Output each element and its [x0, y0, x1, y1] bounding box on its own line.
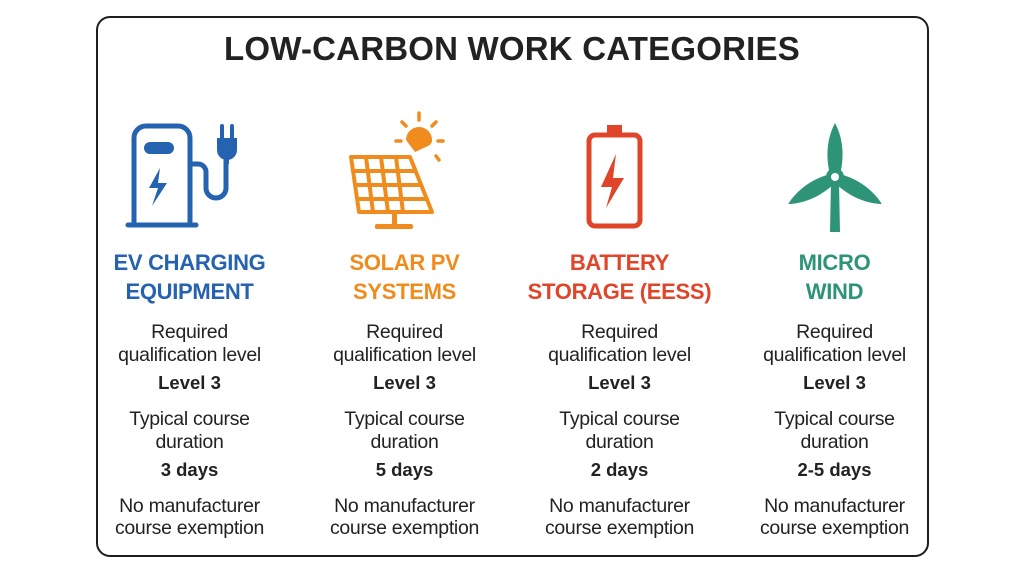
- icon: battery: [586, 125, 642, 228]
- icon: solar panel: [349, 111, 445, 229]
- heading: EV CHARGING: [114, 250, 265, 275]
- panel: Micro wind: [760, 123, 909, 539]
- qualification: Required: [151, 321, 228, 343]
- heading: SOLAR PV: [349, 250, 460, 275]
- panel: EV charging: EQUIPMENT: [125, 279, 254, 304]
- heading: MICRO: [799, 250, 870, 275]
- panel: Battery storage: [528, 125, 711, 539]
- icon: EV charger: [126, 124, 237, 228]
- panel: Micro wind: course exemption: [760, 517, 909, 539]
- panel: Battery storage: 2 days: [591, 459, 648, 480]
- panel: Solar PV: course exemption: [330, 517, 479, 539]
- exemption: No manufacturer: [549, 495, 690, 517]
- panel: Solar PV: [330, 111, 479, 539]
- exemption: No manufacturer: [334, 495, 475, 517]
- duration: Typical course: [344, 408, 465, 430]
- qualification: Required: [581, 321, 658, 343]
- card frame: [96, 16, 929, 557]
- title: LOW-CARBON WORK CATEGORIES: [224, 30, 800, 67]
- panel: Micro wind: qualification level: [763, 344, 906, 366]
- exemption: No manufacturer: [764, 495, 905, 517]
- exemption: No manufacturer: [119, 495, 260, 517]
- qualification: Required: [796, 321, 873, 343]
- panel: Battery storage: STORAGE (EESS): [528, 279, 711, 304]
- panel: Micro wind: Level 3: [803, 372, 866, 393]
- panel: Battery storage: Level 3: [588, 372, 651, 393]
- panel: EV charging: 3 days: [161, 459, 218, 480]
- panel: Micro wind: WIND: [806, 279, 863, 304]
- panel: Battery storage: course exemption: [545, 517, 694, 539]
- panel: EV charging: qualification level: [118, 344, 261, 366]
- panel: Micro wind: 2-5 days: [797, 459, 872, 480]
- duration: Typical course: [774, 408, 895, 430]
- duration: Typical course: [559, 408, 680, 430]
- panel: Solar PV: 5 days: [376, 459, 433, 480]
- icon: wind turbine: [788, 123, 882, 232]
- panel: Battery storage: qualification level: [548, 344, 691, 366]
- panel: Solar PV: SYSTEMS: [353, 279, 456, 304]
- panel: EV charging: [114, 124, 265, 539]
- panel: Solar PV: Level 3: [373, 372, 436, 393]
- panel: EV charging: course exemption: [115, 517, 264, 539]
- panel: Micro wind: duration: [800, 431, 869, 453]
- panel: Solar PV: qualification level: [333, 344, 476, 366]
- panel: EV charging: duration: [155, 431, 224, 453]
- heading: BATTERY: [570, 250, 669, 275]
- qualification: Required: [366, 321, 443, 343]
- panel: Solar PV: duration: [370, 431, 439, 453]
- panel: EV charging: Level 3: [158, 372, 221, 393]
- duration: Typical course: [129, 408, 250, 430]
- panel: Battery storage: duration: [585, 431, 654, 453]
